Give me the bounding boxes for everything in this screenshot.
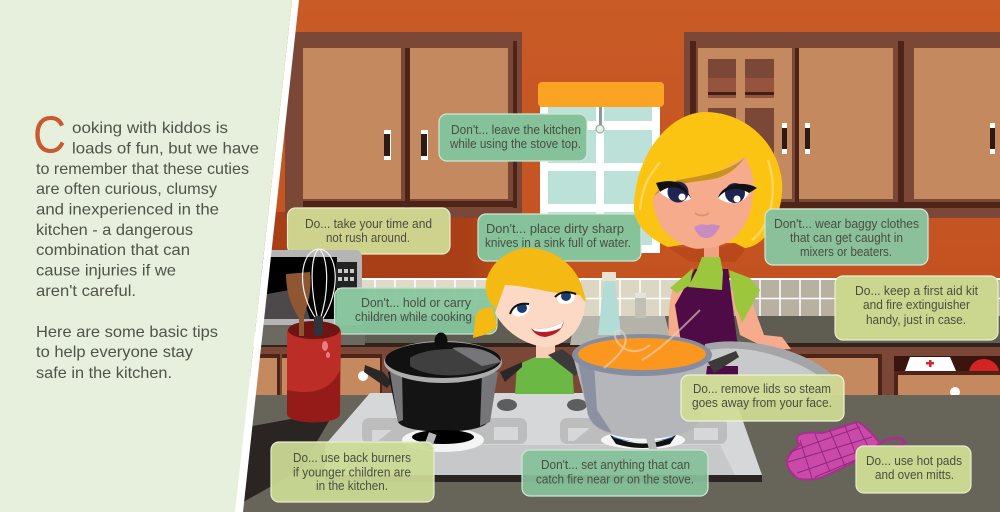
fire extinguisher bbox=[969, 359, 999, 371]
right upper cabinets bbox=[684, 32, 1000, 218]
bubble: don't wear baggy clothes: that can get caught in bbox=[790, 231, 903, 245]
bubble: do use hot pads: Do... use hot pads bbox=[866, 454, 962, 468]
bubble: do use back burners bbox=[271, 442, 434, 502]
black pot: knob bbox=[434, 332, 448, 350]
silver pot: soup bbox=[578, 338, 706, 370]
bubble: do take your time bbox=[288, 208, 450, 254]
bubble: do use back burners: if younger children are bbox=[293, 466, 411, 480]
silver pot: handles bbox=[548, 349, 585, 376]
bubble: don't place knives: knives in a sink full of water. bbox=[485, 236, 631, 250]
bubble: don't set anything bbox=[522, 450, 708, 496]
stove top bbox=[325, 393, 762, 482]
girl: face bbox=[495, 285, 585, 347]
intro paragraph: aren't careful. bbox=[36, 283, 136, 300]
white panel edge bbox=[235, 0, 299, 512]
lower cabinets bbox=[250, 347, 1000, 397]
bubble: don't set anything: catch fire near or on the stove. bbox=[536, 472, 694, 486]
mother: neck bbox=[704, 240, 719, 260]
kitchen wall bbox=[240, 0, 1000, 320]
bubble: don't hold children bbox=[334, 288, 497, 334]
wooden spoon bbox=[286, 272, 311, 336]
bubble: do use hot pads: and oven mitts. bbox=[875, 468, 954, 482]
mother: hair highlights bbox=[640, 160, 773, 240]
apron below pot bbox=[700, 366, 738, 376]
whisk bbox=[303, 249, 335, 336]
oven mitt bbox=[787, 422, 905, 480]
mother: hair fringe shadow bbox=[654, 157, 745, 196]
bubble: do use hot pads bbox=[856, 446, 971, 493]
back counter bbox=[255, 316, 1000, 347]
mother: apron bbox=[675, 269, 745, 375]
intro paragraph: to remember that these cuties bbox=[36, 161, 249, 178]
bubble: do take your time: not rush around. bbox=[326, 231, 410, 245]
bubble: don't hold children: Don't... hold or carry bbox=[361, 296, 472, 310]
left upper cabinets bbox=[285, 32, 522, 218]
girl: pigtail bbox=[473, 308, 497, 338]
bubble: do use back burners: in the kitchen. bbox=[316, 479, 388, 493]
silver pot: steam bbox=[604, 310, 700, 368]
closing paragraph bbox=[36, 324, 218, 382]
front counter bbox=[238, 395, 1000, 512]
silver pot burner flame bbox=[610, 434, 676, 456]
backsplash tiles bbox=[335, 278, 1000, 317]
mother: hair bbox=[634, 112, 782, 248]
first aid kit bbox=[905, 357, 956, 371]
window bbox=[540, 100, 660, 253]
sink bbox=[570, 293, 672, 345]
intro panel bbox=[0, 0, 292, 512]
bubble: do remove lids: Do... remove lids so steam bbox=[693, 382, 831, 396]
bubble: don't leave kitchen bbox=[439, 114, 587, 161]
mother: right arm and hand bbox=[730, 290, 791, 350]
bubble: don't wear baggy clothes: Don't... wear baggy clothes bbox=[774, 217, 919, 231]
intro paragraph bbox=[36, 120, 259, 300]
mother: blouse bbox=[670, 257, 760, 323]
intro paragraph: and inexperienced in the bbox=[36, 202, 219, 218]
closing paragraph: to help everyone stay bbox=[36, 344, 193, 361]
girl: shirt bbox=[515, 357, 574, 394]
bubble: do remove lids: goes away from your face. bbox=[692, 396, 832, 410]
microwave bbox=[262, 250, 362, 325]
bubble: do keep first aid kit: Do... keep a first aid kit bbox=[855, 284, 979, 298]
window blind bbox=[538, 82, 664, 133]
silver pot: body bbox=[574, 360, 708, 439]
bubble: do use back burners: Do... use back burners bbox=[293, 451, 411, 465]
intro paragraph: are often curious, clumsy bbox=[36, 181, 217, 198]
bubble: do remove lids bbox=[681, 375, 844, 421]
mother: eyes bbox=[656, 181, 757, 203]
girl: hair bbox=[486, 248, 586, 313]
intro paragraph: ooking with kiddos is bbox=[72, 120, 228, 137]
mother: nose bbox=[695, 213, 709, 216]
bottle bbox=[598, 272, 621, 335]
black pot: lid bbox=[385, 342, 501, 378]
silver pot: rim bbox=[572, 334, 712, 376]
bubble: don't leave kitchen: while using the stove top. bbox=[449, 137, 581, 151]
pot lid, open bbox=[700, 341, 835, 400]
bubble: don't place knives bbox=[478, 214, 641, 261]
dark wall section bbox=[255, 212, 640, 282]
girl bbox=[473, 248, 586, 394]
intro paragraph: combination that can bbox=[36, 242, 190, 259]
mother: lips bbox=[694, 224, 720, 238]
bubble: don't wear baggy clothes: mixers or beaters. bbox=[800, 245, 892, 259]
bubble: don't set anything: Don't... set anything that can bbox=[541, 458, 690, 472]
closing paragraph: safe in the kitchen. bbox=[36, 365, 172, 382]
bubble: don't hold children: children while cooking bbox=[355, 310, 472, 324]
utensil holder bbox=[287, 321, 341, 422]
drop cap: C bbox=[33, 106, 66, 164]
mother: face bbox=[653, 157, 754, 249]
bubble: don't leave kitchen: Don't... leave the kitchen bbox=[451, 123, 581, 137]
black pot bbox=[364, 332, 522, 450]
bubble: do keep first aid kit bbox=[835, 276, 998, 340]
closing paragraph: Here are some basic tips bbox=[36, 324, 218, 341]
girl: smile bbox=[531, 321, 564, 337]
bubble: do take your time: Do... take your time and bbox=[305, 217, 432, 231]
intro paragraph: cause injuries if we bbox=[36, 262, 176, 280]
girl: eyes bbox=[510, 291, 576, 319]
intro paragraph: kitchen - a dangerous bbox=[36, 222, 193, 239]
silver pot bbox=[548, 310, 739, 439]
black pot: base bbox=[412, 430, 474, 444]
bubble: don't wear baggy clothes bbox=[765, 209, 928, 265]
bubble: do keep first aid kit: and fire extinguisher bbox=[863, 298, 970, 312]
mother bbox=[634, 112, 791, 375]
bubble: do keep first aid kit: handy, just in case. bbox=[866, 313, 966, 327]
shadow on counter bbox=[238, 411, 335, 505]
mother: hair shadow bbox=[668, 243, 745, 262]
bubble: don't place knives: Don't... place dirty sharp bbox=[486, 222, 624, 236]
black pot: body bbox=[388, 372, 498, 432]
black pot: handles bbox=[364, 365, 392, 388]
mother: left arm bbox=[669, 285, 692, 345]
girl: neck bbox=[536, 340, 555, 358]
black pot: rim bbox=[384, 341, 502, 383]
intro paragraph: loads of fun, but we have bbox=[72, 140, 259, 158]
